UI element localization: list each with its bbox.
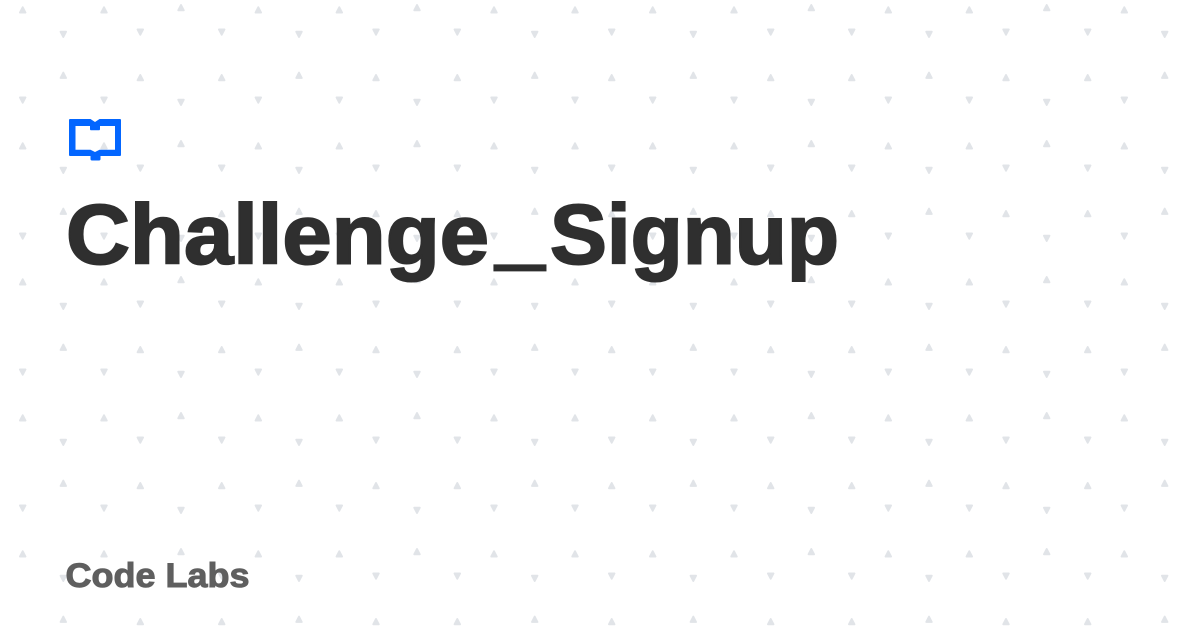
title: Signup <box>550 188 839 282</box>
title: _ <box>494 136 546 282</box>
icon: open book <box>69 119 121 160</box>
title: Challenge <box>66 188 489 282</box>
footer label: Code Labs: Code Labs <box>66 557 250 595</box>
